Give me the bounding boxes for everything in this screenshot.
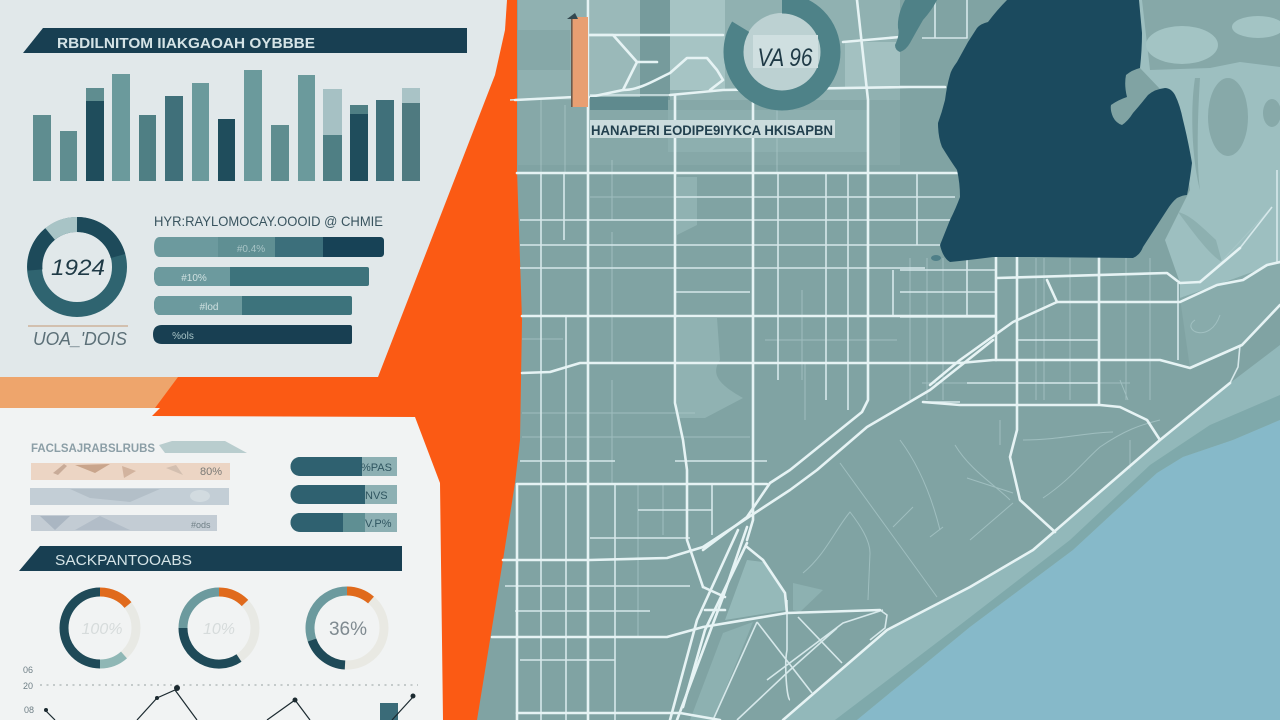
horizontal bar 2 xyxy=(154,267,369,286)
map caption: HANAPERI EODIPE9IYKCA HKISAPBN xyxy=(591,122,833,138)
heading bar xyxy=(23,28,467,53)
chart lines xyxy=(45,690,413,720)
textured bar 3 xyxy=(31,515,217,531)
thin street grid xyxy=(522,100,1272,637)
textured bar 1: 80% xyxy=(200,466,222,478)
donut chart xyxy=(34,224,120,310)
heading bar: RBDILNITOM IIAKGAOAH OYBBBE xyxy=(57,35,315,52)
lake corner spot xyxy=(931,255,941,261)
horizontal bar 3 xyxy=(154,296,352,315)
chart axis labels: 06 xyxy=(23,665,33,675)
pill bar 1: %PAS xyxy=(361,462,392,474)
darker shore xyxy=(835,395,1280,720)
pill bar 1 xyxy=(290,457,397,476)
panel: top left overview xyxy=(0,0,507,377)
horizontal bar 4: %ols xyxy=(172,331,194,342)
chart axis labels: 20 xyxy=(23,681,33,691)
ring chart 1: 100% xyxy=(82,621,122,638)
textured bar 1 xyxy=(31,463,230,480)
small teal inlet xyxy=(895,0,937,52)
major roads xyxy=(492,0,1280,720)
coastal band xyxy=(783,345,1280,720)
column chart xyxy=(33,70,420,181)
horizontal bar 2: #10% xyxy=(181,273,207,284)
top map district tint xyxy=(518,0,900,165)
ring chart 1 xyxy=(64,592,136,664)
section heading: FACLSAJRABSLRUBS xyxy=(31,441,155,455)
donut caption: UOA_'DOIS xyxy=(33,329,127,349)
horizontal bar 1 xyxy=(154,237,384,257)
pill bar 2: NVS xyxy=(365,490,388,502)
ring chart 3 xyxy=(310,591,384,665)
line chart xyxy=(23,665,418,720)
pill bar 3 xyxy=(290,513,397,532)
panel: bottom left detail xyxy=(0,408,443,720)
gauge label box xyxy=(753,35,818,68)
textured bar 2 xyxy=(30,488,229,505)
chart points xyxy=(44,685,416,712)
chart axis labels xyxy=(23,665,34,715)
peach strip xyxy=(0,377,178,408)
ocean xyxy=(857,420,1280,720)
ring chart 2: 10% xyxy=(203,621,235,638)
east light land xyxy=(1139,0,1280,368)
map donut gauge xyxy=(734,4,830,100)
pill bar 2 xyxy=(290,485,397,504)
pill bar 3: V.P% xyxy=(365,518,392,530)
map panel xyxy=(477,0,1280,720)
ring chart 2 xyxy=(183,592,255,664)
medium streets xyxy=(505,0,1277,720)
gauge ring xyxy=(734,4,830,100)
peach location marker xyxy=(567,13,588,107)
second heading bar: SACKPANTOOABS xyxy=(55,552,192,569)
horizontal bar 4 xyxy=(153,325,352,344)
second heading bar xyxy=(19,546,402,571)
section heading xyxy=(31,441,247,455)
Michigan-shaped dark lake xyxy=(938,0,1192,262)
chart axis labels: 08 xyxy=(24,705,34,715)
gauge value: VA 96 xyxy=(758,44,813,72)
chart column xyxy=(380,703,398,720)
ring chart 3: 36% xyxy=(329,619,367,640)
light land patches xyxy=(677,177,823,720)
horizontal bar 1: #0.4% xyxy=(237,244,265,255)
horizontal bar 3: #lod xyxy=(200,302,218,313)
donut chart: 1924 xyxy=(51,255,105,280)
bar list heading: HYR:RAYLOMOCAY.OOOID @ CHMIE xyxy=(154,213,383,229)
land base xyxy=(477,0,1280,720)
map inset strip xyxy=(590,97,668,110)
textured bar 3: #ods xyxy=(191,520,211,530)
